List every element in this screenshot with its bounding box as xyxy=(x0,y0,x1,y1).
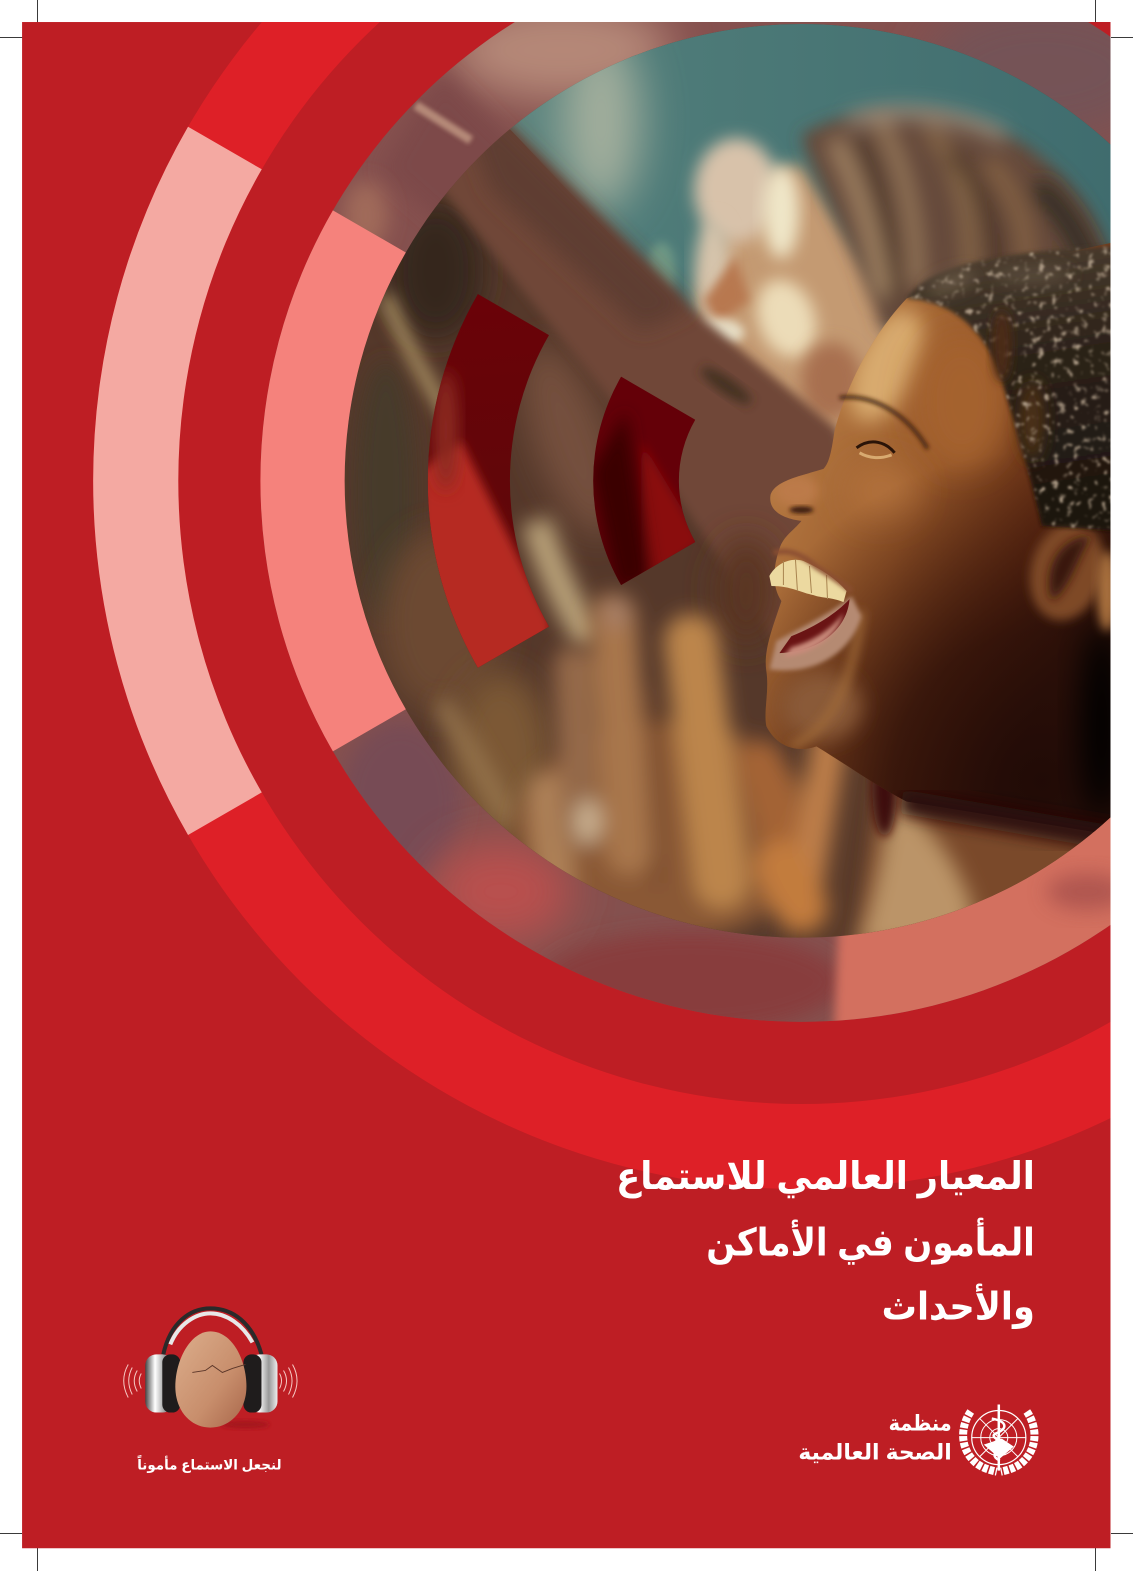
lower left background xyxy=(352,320,776,937)
dark red ring xyxy=(178,0,1133,1104)
raised arm xyxy=(444,126,836,634)
WHO logo xyxy=(798,1405,1034,1472)
title: والأحداث xyxy=(882,1282,1035,1329)
salmon inner arc segment xyxy=(260,210,406,751)
pale pink outer arc segment xyxy=(93,127,262,835)
tinted photo ring xyxy=(240,0,1133,1042)
teal background xyxy=(510,24,1110,316)
icon: shadow xyxy=(221,1421,269,1429)
soft shadow under jaw xyxy=(902,801,1122,840)
foreground woman: hair xyxy=(907,245,1122,531)
foreground woman: face xyxy=(766,243,1110,851)
campaign slogan: لنجعل الاستماع مأموناً xyxy=(137,1455,282,1474)
icon: crack xyxy=(192,1364,245,1372)
blurred person behind xyxy=(688,111,1118,441)
icon: WHO emblem xyxy=(963,1405,1034,1472)
photo: concert crowd xyxy=(331,10,1132,952)
ear xyxy=(1024,526,1108,626)
small dark red wave arc xyxy=(593,376,696,585)
teeth xyxy=(769,560,847,602)
icon: sound waves xyxy=(124,1364,297,1398)
organisation name: منظمة xyxy=(889,1411,952,1436)
organisation name: الصحة العالمية xyxy=(798,1440,952,1465)
campaign logo: egg with headphones xyxy=(124,1308,297,1474)
outer bright red ring xyxy=(93,0,1133,1189)
inner dark red wave arc xyxy=(428,294,549,668)
eye and brow xyxy=(840,397,928,449)
organisation name xyxy=(798,1411,952,1465)
blurred clapping hands xyxy=(516,597,829,942)
title xyxy=(616,1156,1035,1329)
icon: left ear cup xyxy=(145,1354,180,1413)
icon: right ear cup xyxy=(243,1354,277,1413)
title: المأمون في الأماكن xyxy=(706,1217,1035,1264)
icon: egg xyxy=(175,1331,246,1428)
foreground woman: neck xyxy=(855,806,1093,934)
icon: headband xyxy=(163,1308,261,1354)
open mouth xyxy=(769,596,862,670)
golden light streak xyxy=(376,286,442,422)
title: المعيار العالمي للاستماع xyxy=(616,1156,1035,1198)
